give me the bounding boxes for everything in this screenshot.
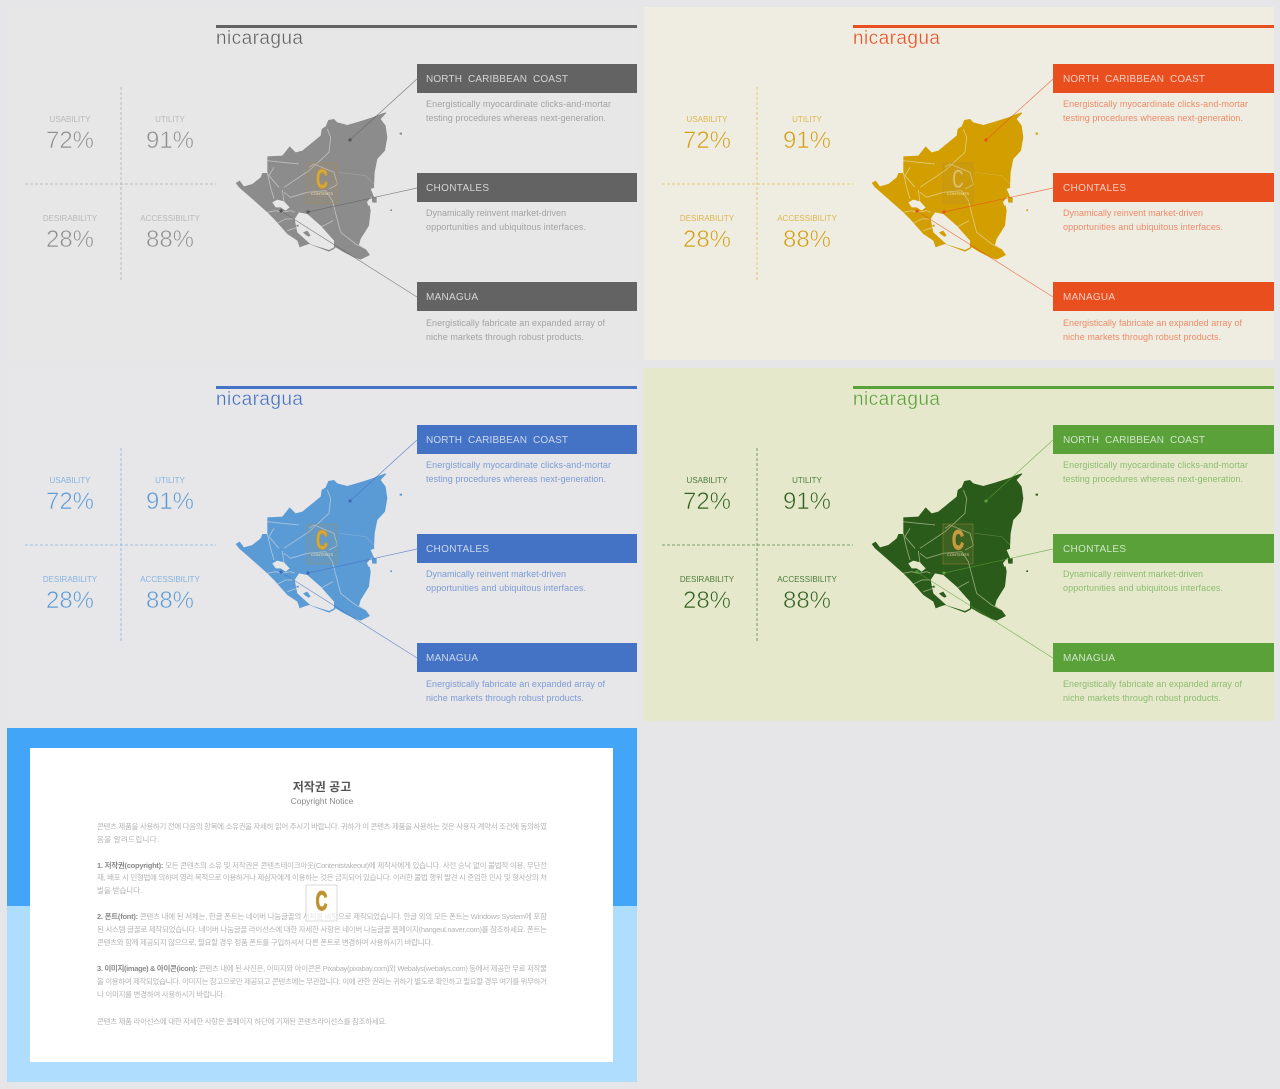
title: nicaragua: nicaragua [853,28,940,49]
stats grid: 91% [146,127,194,154]
title: nicaragua [216,25,637,49]
callout: north caribbean coast: Energistically myocardinate clicks-and-mortar [1063,99,1248,109]
callout: north caribbean coast: NORTH CARIBBEAN COAST [426,74,568,85]
callout: north caribbean coast: testing procedures whereas next-generation. [1063,474,1243,484]
stats grid: 88% [783,587,831,614]
callout: chontales: CHONTALES [426,544,489,555]
logo watermark [943,524,973,564]
callout: chontales: Dynamically reinvent market-driven [1063,569,1203,579]
stats grid [662,87,853,280]
logo watermark: C [316,525,328,555]
stats grid: USABILITY [687,476,728,485]
stats grid: 88% [146,587,194,614]
stats grid: 88% [783,226,831,253]
callout: managua: Energistically fabricate an expanded array of [1063,679,1242,689]
callout: north caribbean coast: NORTH CARIBBEAN COAST [1063,435,1205,446]
callout: managua: Energistically fabricate an expanded array of [426,679,605,689]
logo watermark: CONTENTS [311,191,333,196]
panel: blue nicaragua [7,368,637,721]
callout: chontales [1053,534,1274,593]
callout: north caribbean coast [417,425,637,484]
copyright body text: 음을 알려드립니다. [97,834,159,844]
leader lines [279,440,417,658]
title: nicaragua: nicaragua [216,28,303,49]
map of nicaragua [872,112,1038,260]
callout: chontales [417,173,637,232]
callout: managua: niche markets through robust products. [426,332,584,342]
copyright body text: 3. 이미지(image) & 아이콘(icon): 콘텐츠 내에 된 사진은, 이미지와 아이콘은 Pixabay(pixabay.com)와 Webalys(webalys.com) 등에서 제공한 무료 저작물 [97,963,547,973]
map of nicaragua [872,473,1038,621]
copyright heading: Copyright Notice [291,796,354,806]
stats grid: 88% [146,226,194,253]
copyright body text: 1. 저작권(copyright): 모든 콘텐츠의 소유 및 저작권은 콘텐츠테이크아웃(Contentstakeout)에 제작사에게 있습니다. 사전 승낙 없이 불법적 이용, 무단전 [97,860,547,870]
callout: managua [1053,643,1274,703]
logo watermark [307,163,337,203]
callout: chontales: Dynamically reinvent market-driven [426,208,566,218]
copyright heading: 저작권 공고 [293,779,351,794]
callout: managua: MANAGUA [426,653,478,664]
logo watermark [307,524,337,564]
callout: chontales: opportunities and ubiquitous interfaces. [1063,583,1223,593]
callout: chontales: opportunities and ubiquitous interfaces. [426,583,586,593]
leader lines [915,79,1053,297]
callout: managua: Energistically fabricate an expanded array of [426,318,605,328]
stats grid: 28% [683,587,731,614]
copyright body text: 나 이미지를 변경하여 사용하시기 바랍니다. [97,989,225,999]
stats grid: DESIRABILITY [43,214,98,223]
stats grid: 72% [46,488,94,515]
logo watermark: C [952,525,964,555]
callout: north caribbean coast: Energistically myocardinate clicks-and-mortar [1063,460,1248,470]
stats grid: 72% [683,488,731,515]
stats grid: DESIRABILITY [680,575,735,584]
callout: north caribbean coast [1053,425,1274,484]
callout: chontales: CHONTALES [1063,183,1126,194]
stats grid: 72% [683,127,731,154]
callout: chontales: opportunities and ubiquitous interfaces. [1063,222,1223,232]
stats grid: 91% [146,488,194,515]
callout: managua: MANAGUA [1063,292,1115,303]
callout: north caribbean coast [417,64,637,123]
logo watermark: C [316,164,328,194]
stats grid [25,87,216,280]
logo watermark [306,885,337,921]
copyright body text: 된 시스템 글꼴로 제작되었습니다. 네이버 나눔글꼴 라이선스에 대한 자세한 사항은 네이버 나눔글꼴 홈페이지(hangeul.naver.com)를 참조하세요. 폰트는 [97,924,547,934]
callout: managua: niche markets through robust products. [1063,332,1221,342]
map of nicaragua [236,473,402,621]
callout: chontales: Dynamically reinvent market-driven [426,569,566,579]
map of nicaragua [236,112,402,260]
stats grid: USABILITY [50,476,91,485]
stats grid: USABILITY [50,115,91,124]
callout: north caribbean coast: testing procedures whereas next-generation. [426,113,606,123]
stats grid: USABILITY [687,115,728,124]
leader lines [279,79,417,297]
stats grid: UTILITY [792,476,823,485]
callout: north caribbean coast: NORTH CARIBBEAN COAST [426,435,568,446]
title: nicaragua: nicaragua [853,389,940,410]
panel: green nicaragua [644,368,1274,721]
callout: managua: MANAGUA [426,292,478,303]
callout: north caribbean coast: Energistically myocardinate clicks-and-mortar [426,460,611,470]
panel: grey nicaragua [7,7,637,360]
callout: chontales: CHONTALES [1063,544,1126,555]
stats grid: 28% [46,226,94,253]
panel: copyright notice [7,728,637,1082]
callout: chontales: CHONTALES [426,183,489,194]
callout: north caribbean coast: testing procedures whereas next-generation. [1063,113,1243,123]
copyright body text: 콘텐츠와 함께 제공되지 않으므로, 필요할 경우 정품 폰트를 구입하셔서 다른 폰트로 변경하여 사용하시기 바랍니다. [97,937,433,947]
title: nicaragua [853,386,1274,410]
stats grid: 91% [783,488,831,515]
logo watermark: CONTENTS [947,552,969,557]
callout: chontales [1053,173,1274,232]
copyright body text: 콘텐츠 제품을 사용하기 전에 다음의 항목에 소유권을 자세히 읽어 주시기 바랍니다. 귀하가 이 콘텐츠 제품을 사용하는 것은 사용자 계약서 조건에 동의하였 [97,821,547,831]
callout: managua: niche markets through robust products. [426,693,584,703]
callout: north caribbean coast: Energistically myocardinate clicks-and-mortar [426,99,611,109]
copyright body text: 콘텐츠 제품 라이선스에 대한 자세한 사항은 홈페이지 하단에 기재된 콘텐츠라이선스를 참조하세요. [97,1016,387,1026]
title: nicaragua: nicaragua [216,389,303,410]
stats grid: 28% [46,587,94,614]
stats grid: UTILITY [792,115,823,124]
logo watermark: C [316,886,327,916]
title: nicaragua [216,386,637,410]
stats grid: ACCESSIBILITY [140,214,200,223]
callout: managua [417,282,637,342]
copyright body text: 재, 배포 시 민형법에 의하여 영리 목적으로 이용하거나 제삼자에게 이용하는 것은 금지되어 있습니다. 이러한 불법 행위 발견 시 준엄한 민사 및 형사상의 처 [97,872,547,882]
logo watermark: CONTENTS [311,552,333,557]
logo watermark [943,163,973,203]
title: nicaragua [853,25,1274,49]
callout: managua: niche markets through robust products. [1063,693,1221,703]
stats grid: 91% [783,127,831,154]
callout: chontales: Dynamically reinvent market-driven [1063,208,1203,218]
callout: managua: Energistically fabricate an expanded array of [1063,318,1242,328]
callout: north caribbean coast: NORTH CARIBBEAN COAST [1063,74,1205,85]
stats grid: ACCESSIBILITY [777,214,837,223]
stats grid: DESIRABILITY [43,575,98,584]
callout: chontales [417,534,637,593]
copyright body text [97,821,547,1026]
stats grid: UTILITY [155,476,186,485]
copyright body text: 벌을 받습니다. [97,885,142,895]
stats grid: ACCESSIBILITY [777,575,837,584]
stats grid [662,448,853,641]
leader lines [915,440,1053,658]
copyright heading [291,779,354,806]
callout: chontales: opportunities and ubiquitous interfaces. [426,222,586,232]
stats grid [25,448,216,641]
copyright body text: 을 이용하여 제작되었습니다. 이미지는 참고으로만 제공되고 콘텐츠에는 무관합니다. 이에 관한 권리는 귀하가 별도로 확인하고 필요할 경우 여기를 위무하거 [97,976,547,986]
logo watermark: CONTENTS [947,191,969,196]
panel: orange nicaragua [644,7,1274,360]
callout: north caribbean coast: testing procedures whereas next-generation. [426,474,606,484]
stats grid: ACCESSIBILITY [140,575,200,584]
stats grid: UTILITY [155,115,186,124]
logo watermark: C [952,164,964,194]
stats grid: DESIRABILITY [680,214,735,223]
stats grid: 28% [683,226,731,253]
callout: north caribbean coast [1053,64,1274,123]
callout: managua [417,643,637,703]
callout: managua: MANAGUA [1063,653,1115,664]
copyright body text: 2. 폰트(font): 콘텐츠 내에 된 서체는, 한글 폰트는 네이버 나눔글꼴의 서체를 바탕으로 제작되었습니다. 한글 외의 모든 폰트는 Windows System에 포함 [97,911,547,921]
callout: managua [1053,282,1274,342]
stats grid: 72% [46,127,94,154]
